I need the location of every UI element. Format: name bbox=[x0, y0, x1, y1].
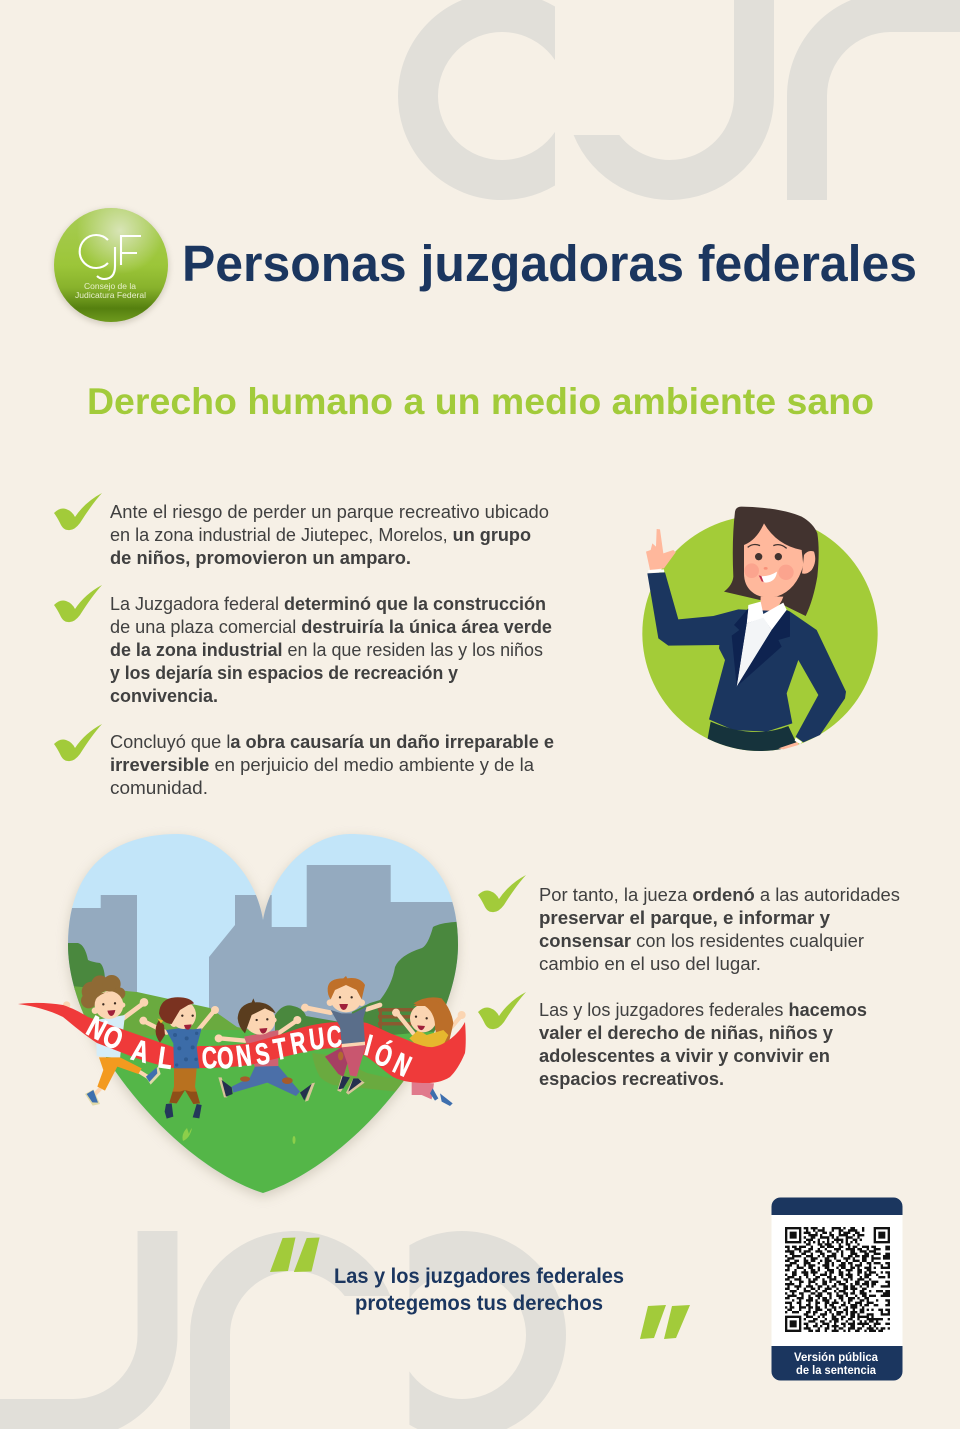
banner lettering: C bbox=[201, 1042, 218, 1075]
illustration: judge in green circle bbox=[642, 507, 878, 757]
text block: orden de preservar: preservar el parque, e informar y bbox=[539, 907, 831, 928]
text block: hacemos valer el derecho: espacios recreativos. bbox=[539, 1068, 724, 1089]
text block: riesgo del parque bbox=[110, 501, 549, 568]
banner lettering: N bbox=[81, 1009, 112, 1047]
text block: daño irreparable: irreversible en perjuicio del medio ambiente y de la bbox=[110, 754, 535, 775]
subtitle: Derecho humano a un medio ambiente sano bbox=[87, 381, 874, 422]
check icon 5 bbox=[478, 992, 526, 1029]
text block: determinación de la jueza: de una plaza comercial destruiría la única área verde bbox=[110, 616, 552, 637]
banner lettering: S bbox=[253, 1038, 272, 1072]
text block: orden de preservar bbox=[539, 884, 900, 974]
title: Personas juzgadoras federales bbox=[182, 235, 917, 292]
text block: hacemos valer el derecho: adolescentes a vivir y convivir en bbox=[539, 1045, 830, 1066]
opening quotation mark bbox=[270, 1238, 320, 1272]
logo: Consejo de la Judicatura Federal bbox=[53, 208, 169, 325]
check icon 1 bbox=[54, 493, 102, 530]
banner lettering: L bbox=[156, 1041, 175, 1076]
text block: orden de preservar: cambio en el uso del lugar. bbox=[539, 953, 761, 974]
text block: riesgo del parque: en la zona industrial de Jiutepec, Morelos, un grupo bbox=[110, 524, 531, 545]
heart scene: park and city bbox=[60, 830, 470, 1200]
quote text: protegemos tus derechos bbox=[355, 1292, 603, 1315]
banner lettering: C bbox=[326, 1021, 343, 1054]
banner lettering: A bbox=[128, 1033, 153, 1070]
quote text: Las y los juzgadores federales bbox=[334, 1265, 624, 1288]
text block: daño irreparable: comunidad. bbox=[110, 777, 208, 798]
text block: hacemos valer el derecho: Las y los juzgadores federales hacemos bbox=[539, 999, 867, 1020]
illustration: heart with children and banner bbox=[18, 830, 470, 1200]
banner lettering: I bbox=[361, 1030, 375, 1062]
banner lettering: O bbox=[216, 1042, 235, 1076]
text block: daño irreparable bbox=[110, 731, 554, 798]
logo: Consejo de la Judicatura Federal: Consejo de la bbox=[84, 282, 137, 291]
text block: riesgo del parque: de niños, promovieron un amparo. bbox=[110, 547, 411, 568]
QR code bbox=[785, 1228, 890, 1331]
text block: hacemos valer el derecho bbox=[539, 999, 867, 1089]
banner bbox=[18, 1003, 466, 1083]
banner lettering: O bbox=[98, 1019, 127, 1057]
banner lettering: N bbox=[234, 1040, 253, 1074]
check icon 2 bbox=[54, 585, 102, 622]
child 1 bbox=[63, 975, 161, 1106]
banner lettering: N bbox=[388, 1048, 416, 1084]
banner lettering bbox=[81, 1009, 416, 1084]
QR card: de la sentencia bbox=[796, 1363, 876, 1377]
child 2 bbox=[139, 997, 219, 1119]
watermark: top letters bbox=[418, 0, 960, 200]
quote text bbox=[334, 1265, 624, 1315]
banner lettering: T bbox=[271, 1033, 290, 1067]
text block: determinación de la jueza: La Juzgadora federal determinó que la construcción bbox=[110, 593, 546, 614]
text block: determinación de la jueza: y los dejaría sin espacios de recreación y bbox=[110, 662, 459, 683]
closing quotation mark bbox=[640, 1305, 690, 1339]
logo: Consejo de la Judicatura Federal: Judicatura Federal bbox=[75, 291, 146, 300]
text block: determinación de la jueza: de la zona industrial en la que residen las y los niños bbox=[110, 639, 543, 660]
text block: orden de preservar: Por tanto, la jueza ordenó a las autoridades bbox=[539, 884, 900, 905]
banner lettering: R bbox=[288, 1027, 309, 1061]
child 4 bbox=[301, 976, 380, 1095]
text block: determinación de la jueza bbox=[110, 593, 552, 706]
banner lettering: U bbox=[307, 1023, 326, 1057]
check icon 3 bbox=[54, 724, 102, 761]
child 5 bbox=[392, 997, 466, 1106]
text block: determinación de la jueza: convivencia. bbox=[110, 685, 218, 706]
check icon 4 bbox=[478, 875, 526, 912]
watermark: bottom letters bbox=[0, 1231, 546, 1429]
text block: hacemos valer el derecho: valer el derecho de niñas, niños y bbox=[539, 1022, 834, 1043]
text block: orden de preservar: consensar con los residentes cualquier bbox=[539, 930, 864, 951]
text block: riesgo del parque: Ante el riesgo de perder un parque recreativo ubicado bbox=[110, 501, 549, 522]
banner lettering: Ó bbox=[370, 1036, 397, 1074]
child 3 bbox=[215, 998, 315, 1102]
text block: daño irreparable: Concluyó que la obra causaría un daño irreparable e bbox=[110, 731, 554, 752]
QR card: Versión pública bbox=[794, 1350, 878, 1364]
QR card bbox=[772, 1198, 902, 1380]
